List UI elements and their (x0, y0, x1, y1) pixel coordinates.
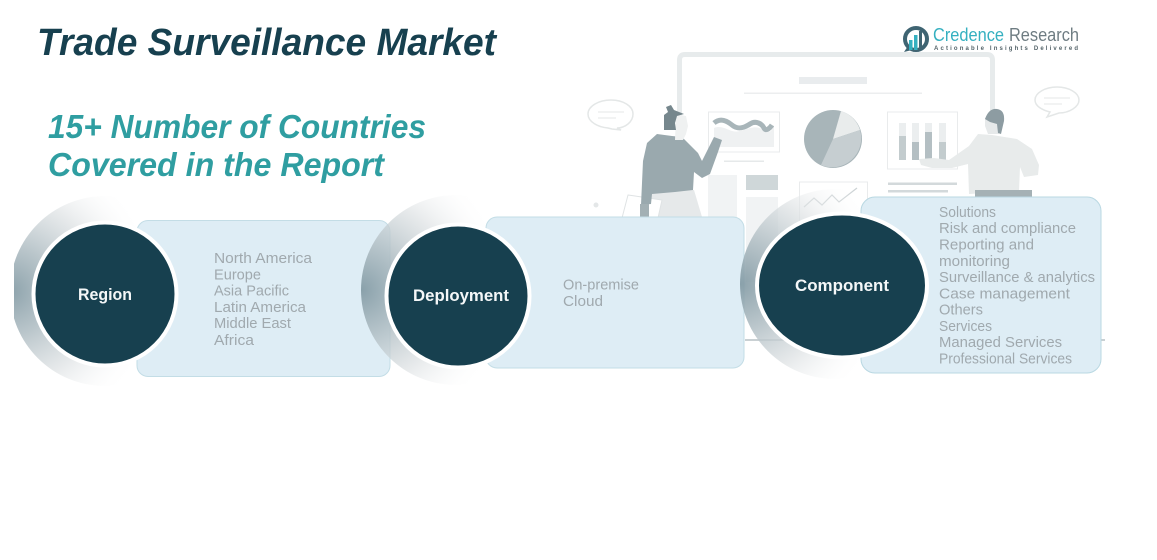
logo wordmark (933, 25, 1079, 45)
component items: Professional Services (939, 350, 1072, 368)
component label: Component (795, 276, 889, 295)
component crescent (740, 189, 930, 379)
man face (985, 118, 999, 134)
panel: component (740, 189, 1101, 379)
region items: Latin America (214, 299, 307, 316)
panel: region (10, 196, 390, 386)
region circle (34, 222, 176, 366)
component items (939, 204, 1095, 368)
region label: Region (78, 285, 132, 304)
monitor heading bar (799, 77, 867, 84)
woman hair (664, 105, 684, 130)
monitor base line (745, 339, 1105, 341)
component items: Solutions (939, 204, 996, 221)
region items: Asia Pacific (214, 282, 289, 300)
woman face (675, 114, 688, 140)
man body and arm (919, 134, 1039, 194)
component items: Risk and compliance (939, 220, 1076, 237)
woman figure (594, 105, 722, 218)
title: Trade Surveillance Market (37, 22, 497, 64)
deployment items: On-premise (563, 276, 639, 294)
woman torso and arm (641, 134, 722, 205)
logo wordmark: Research (1009, 25, 1079, 45)
subheading (48, 108, 426, 183)
woman paper (622, 195, 662, 218)
deployment list panel (486, 217, 744, 368)
deployment items: Cloud (563, 293, 603, 310)
subheading: Covered in the Report (48, 146, 386, 183)
bar chart (888, 112, 958, 169)
deployment items (563, 276, 639, 310)
component items: monitoring (939, 253, 1010, 270)
component items: Surveillance & analytics (939, 269, 1095, 286)
component ellipse (757, 214, 927, 358)
region crescent (14, 200, 100, 382)
component items: Managed Services (939, 334, 1062, 351)
subheading: 15+ Number of Countries (48, 108, 426, 145)
component items: Reporting and (939, 236, 1034, 254)
illustration: analytics presentation (588, 54, 1105, 341)
region items: Middle East (214, 315, 292, 332)
region items: North America (214, 250, 313, 267)
logo wordmark: Credence (933, 25, 1004, 45)
panel: deployment (361, 195, 744, 385)
logo: Credence Research (904, 25, 1079, 52)
component list panel (861, 197, 1101, 373)
pie chart (804, 110, 862, 168)
logo tagline: Actionable Insights Delivered (934, 46, 1078, 52)
man figure (919, 109, 1039, 197)
region items: Europe (214, 266, 261, 284)
region items (214, 250, 313, 349)
region list panel (137, 220, 390, 376)
monitor frame (680, 54, 992, 118)
speech bubble right (1035, 87, 1079, 117)
icon: logo mark (904, 28, 927, 52)
wave chart (708, 112, 780, 152)
component items: Case management (939, 286, 1071, 302)
man hair (985, 109, 1004, 134)
woman trousers (650, 190, 702, 217)
deployment circle (386, 224, 530, 368)
component items: Others (939, 302, 983, 318)
deployment label: Deployment (413, 286, 509, 305)
component items: Services (939, 318, 992, 335)
region items: Africa (214, 332, 255, 349)
speech bubble left (588, 100, 633, 130)
deployment crescent (361, 195, 551, 385)
lower monitor blocks (708, 160, 957, 282)
